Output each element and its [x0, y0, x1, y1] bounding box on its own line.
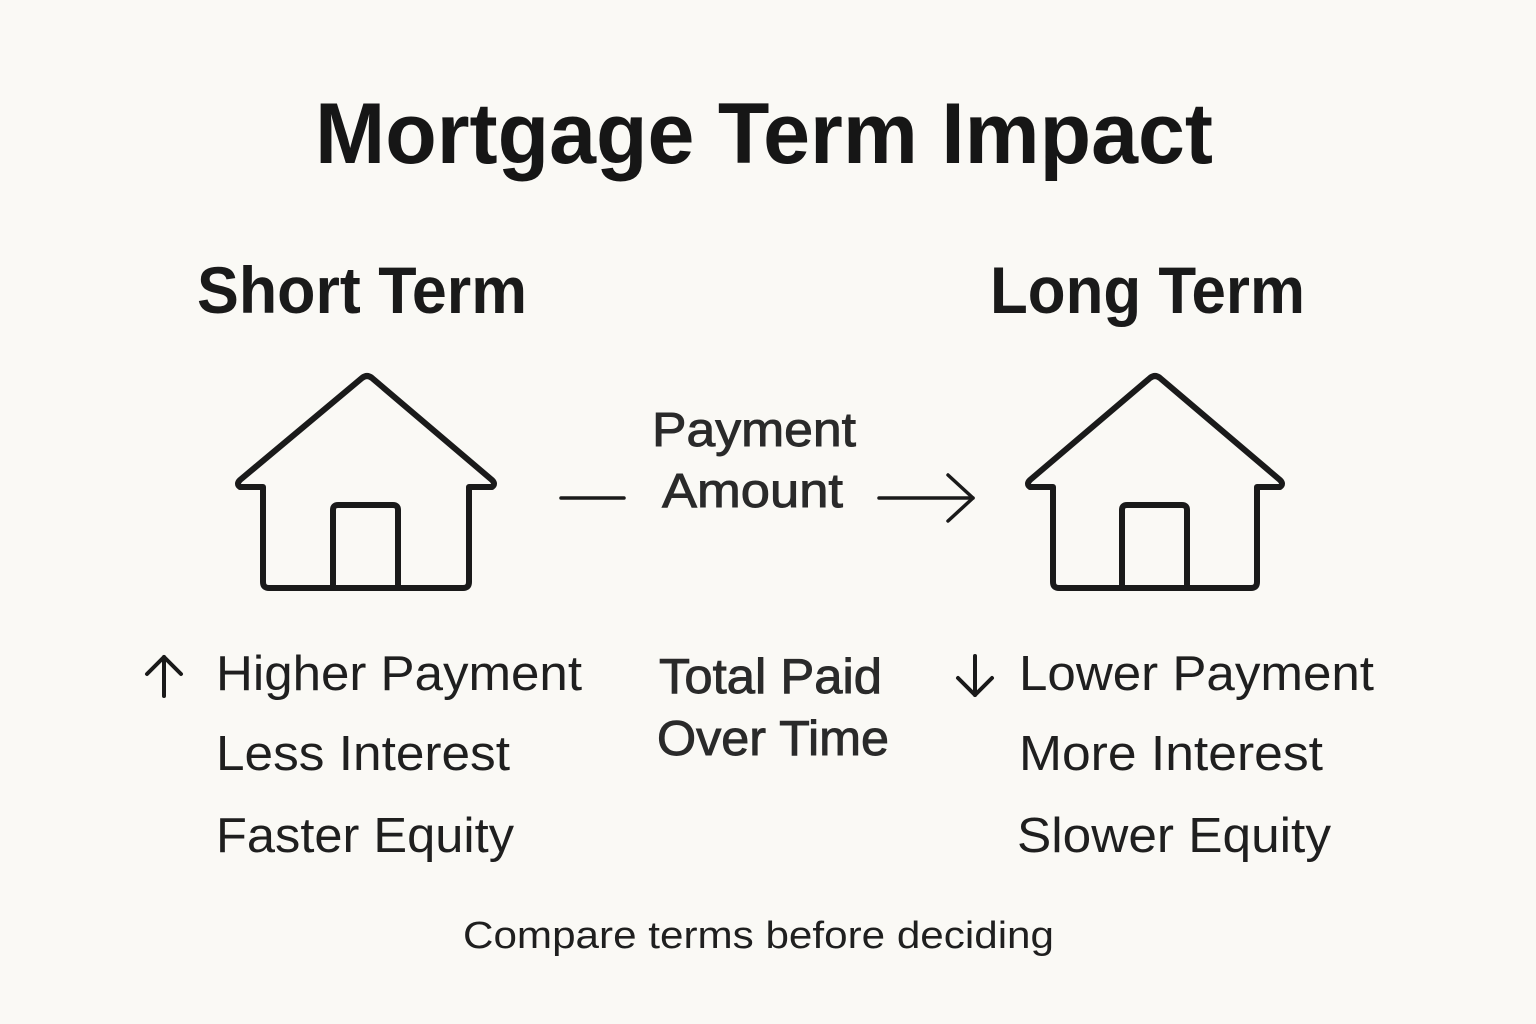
heading: long term: Long Term [990, 253, 1305, 327]
label: total paid over time [657, 650, 889, 766]
icon: down arrow [958, 656, 992, 695]
arrow: payment dash and arrow [561, 475, 973, 521]
label: total paid over time: Over Time [657, 712, 889, 766]
label: total paid over time: Total Paid [659, 650, 882, 704]
list: short term effects: Less Interest [216, 727, 510, 781]
icon: up arrow [147, 657, 181, 696]
label: payment amount: Amount [662, 465, 843, 518]
label: payment amount: Payment [652, 404, 856, 457]
list: long term effects: Lower Payment [1019, 647, 1374, 701]
footer note: Compare terms before deciding [463, 915, 1054, 957]
list: short term effects: Higher Payment [216, 647, 582, 701]
label: payment amount [652, 404, 856, 518]
list: long term effects: Slower Equity [1017, 809, 1332, 863]
list: long term effects [1017, 647, 1374, 863]
list: long term effects: More Interest [1019, 727, 1323, 781]
icon: long term house [1028, 376, 1282, 588]
heading: short term: Short Term [197, 253, 527, 327]
list: short term effects: Faster Equity [216, 809, 515, 863]
title: Mortgage Term Impact [315, 86, 1213, 182]
list: short term effects [216, 647, 582, 863]
icon: short term house [238, 376, 494, 588]
